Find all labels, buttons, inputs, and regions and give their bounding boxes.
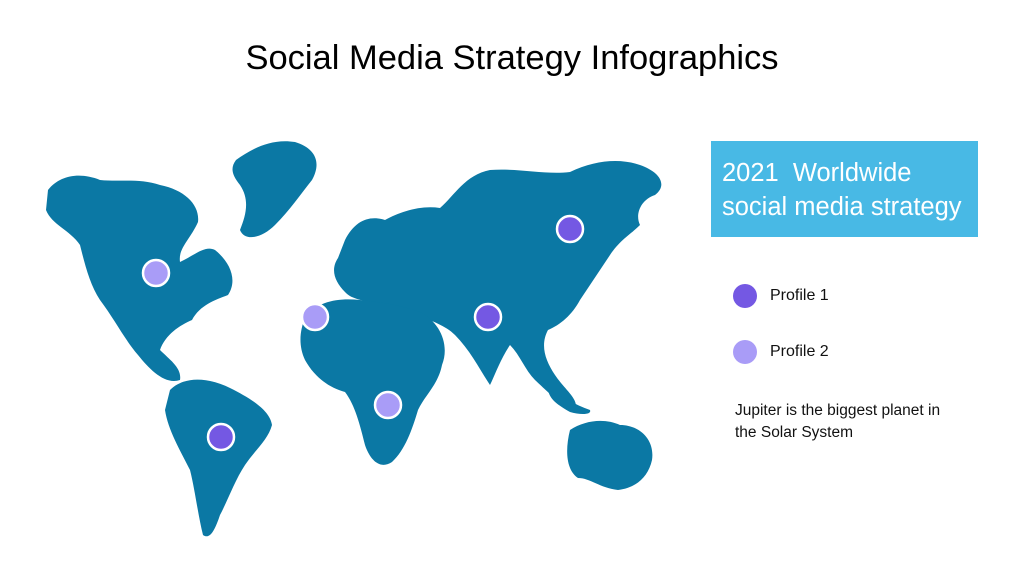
- North America: [46, 176, 232, 381]
- title box: [711, 141, 978, 237]
- Australia: [567, 421, 652, 490]
- note text: [735, 402, 940, 441]
- Eurasia: [334, 161, 661, 410]
- legend: profile 2: [733, 340, 829, 364]
- note text: the Solar System: [735, 424, 853, 441]
- legend: profile 2: Profile 2: [770, 343, 829, 360]
- note text: Jupiter is the biggest planet in: [735, 402, 940, 419]
- Greenland: [233, 141, 317, 237]
- markers: [143, 216, 583, 450]
- South America: [165, 380, 272, 536]
- title: Social Media Strategy Infographics: [245, 39, 779, 77]
- Africa: [300, 299, 445, 465]
- title box: 2021 Worldwide: [722, 159, 911, 187]
- legend: profile 1: Profile 1: [770, 287, 829, 304]
- title box: social media strategy: [722, 193, 962, 221]
- legend: profile 1: [733, 284, 829, 308]
